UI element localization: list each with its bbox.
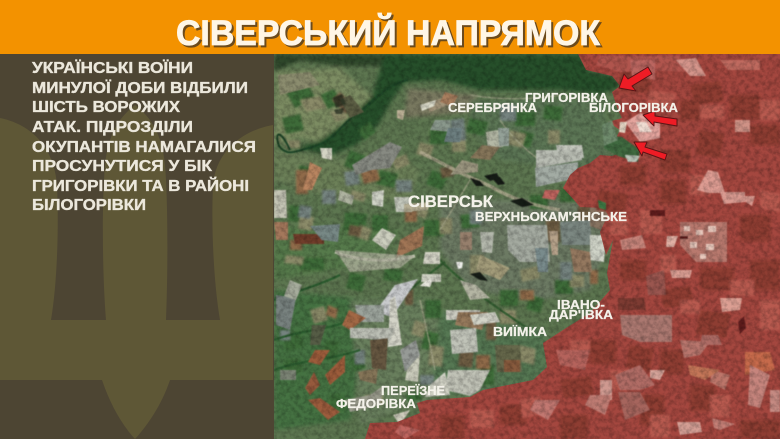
label: Pereizne: ПЕРЕЇЗНЕ <box>381 383 445 398</box>
panel: text block: УКРАЇНСЬКІ ВОЇНИ <box>32 60 193 77</box>
map: water bodies <box>333 94 534 281</box>
arrow: towards Bilohorivka <box>643 111 677 126</box>
panel: text block <box>32 60 256 214</box>
map: image grain <box>274 54 780 439</box>
panel: text block: БІЛОГОРІВКИ <box>32 197 146 214</box>
panel: left text background <box>0 54 274 439</box>
label: Fedorivka: ФЕДОРІВКА <box>336 396 417 411</box>
label: Ivano-Darivka line 2: ДАР'ІВКА <box>549 307 614 322</box>
panel: text block: ГРИГОРІВКИ ТА В РАЙОНІ <box>32 177 249 195</box>
map: mottled farmland underlay <box>280 82 598 411</box>
map: rivers and settlements <box>274 80 560 370</box>
map labels <box>336 90 679 411</box>
map: fields <box>274 72 610 425</box>
map: occupied territory fields <box>395 56 780 439</box>
label: Siversk: СІВЕРСЬК <box>408 192 494 211</box>
label: Bilohorivka: БІЛОГОРІВКА <box>589 100 679 115</box>
label: Ivano-Darivka line 1: ІВАНО- <box>557 297 605 312</box>
panel: text block: АТАК. ПІДРОЗДІЛИ <box>32 119 193 136</box>
arrow: towards Hryhorivka <box>619 67 652 91</box>
label: Serebrianka: СЕРЕБРЯНКА <box>448 100 538 115</box>
map: forest and terrain <box>274 54 620 430</box>
panel: satellite map <box>274 54 780 439</box>
title: СІВЕРСЬКИЙ НАПРЯМОК <box>178 15 603 55</box>
label: Verkhnokamianske: ВЕРХНЬОКАМ'ЯНСЬКЕ <box>475 209 627 224</box>
label: Hryhorivka: ГРИГОРІВКА <box>525 90 609 105</box>
icon: trident emblem <box>0 105 273 439</box>
panel: text block: МИНУЛОЇ ДОБИ ВІДБИЛИ <box>32 80 248 97</box>
panel: text block: ПРОСУНУТИСЯ У БІК <box>32 158 213 175</box>
label: Vyimka: ВИЇМКА <box>493 324 548 339</box>
panel: text block: ШІСТЬ ВОРОЖИХ <box>32 99 181 116</box>
map: green pocket near Bilohorivka <box>598 120 640 210</box>
header bar <box>0 0 780 54</box>
title: СІВЕРСЬКИЙ НАПРЯМОК <box>176 13 601 53</box>
arrow: south of Bilohorivka <box>634 142 667 160</box>
panel: text block: ОКУПАНТІВ НАМАГАЛИСЯ <box>32 139 256 156</box>
map: occupied territory overlay <box>365 54 780 439</box>
map: occupied territory mottling <box>440 72 780 439</box>
